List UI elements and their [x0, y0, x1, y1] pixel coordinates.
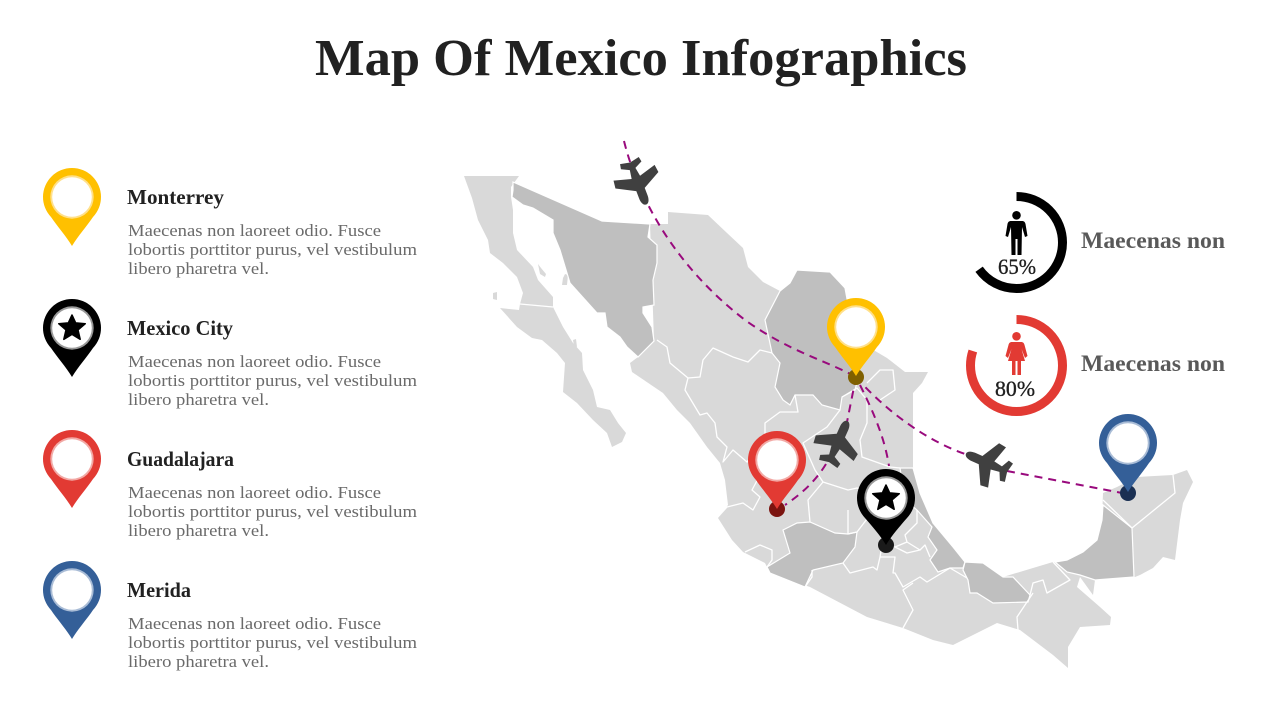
- map: mainland Mexico: [630, 212, 1193, 668]
- map: Baja California peninsula: [464, 176, 626, 447]
- map pin: Merida: [1099, 414, 1157, 501]
- map: Campeche: [1055, 505, 1134, 580]
- donut: 80%: [970, 320, 1062, 412]
- text block: Guadalajara: lobortis porttitor purus, vel vestibulum: [128, 502, 417, 521]
- map pin: Mexico City: [857, 469, 915, 553]
- legend item: Mexico City: [43, 299, 417, 409]
- text block: Guadalajara: Maecenas non laoreet odio. Fusce: [128, 483, 381, 502]
- map: state borders: [657, 340, 1175, 630]
- icon: airplane 3: [957, 433, 1018, 494]
- icon: red pin: [43, 430, 101, 508]
- map pin: Monterrey: [827, 298, 885, 385]
- text block: Mexico City: libero pharetra vel.: [128, 390, 269, 409]
- legend item: Merida: [43, 561, 417, 671]
- label: Maecenas non: Maecenas non: [1081, 228, 1225, 253]
- text block: Merida: Maecenas non laoreet odio. Fusce: [128, 614, 381, 633]
- map: Veracruz: [900, 468, 965, 572]
- text block: Guadalajara: libero pharetra vel.: [128, 521, 269, 540]
- icon: black star pin: [43, 299, 101, 377]
- map: Michoacan: [767, 522, 857, 587]
- heading: Monterrey: Monterrey: [127, 185, 224, 209]
- icon: blue pin: [43, 561, 101, 639]
- icon: man: [1006, 211, 1028, 255]
- text block: Mexico City: Maecenas non laoreet odio. Fusce: [128, 352, 381, 371]
- label: 65%: 65%: [998, 254, 1036, 279]
- map pin: Guadalajara: [748, 431, 806, 517]
- map: southern Veracruz: [963, 562, 1030, 603]
- donut: 65%: [970, 196, 1062, 288]
- legend item: Guadalajara: [43, 430, 417, 540]
- text block: Merida: libero pharetra vel.: [128, 652, 269, 671]
- text block: Monterrey: Maecenas non laoreet odio. Fusce: [128, 221, 381, 240]
- text block: Monterrey: lobortis porttitor purus, vel vestibulum: [128, 240, 417, 259]
- text block: Monterrey: [128, 221, 417, 278]
- heading: Merida: Merida: [127, 578, 191, 602]
- heading: Mexico City: Mexico City: [127, 316, 233, 340]
- icon: airplane 2: [807, 412, 868, 473]
- text block: Merida: lobortis porttitor purus, vel vestibulum: [128, 633, 417, 652]
- map of Mexico: [464, 176, 1193, 668]
- icon: yellow pin: [43, 168, 101, 246]
- label: 80%: 80%: [995, 376, 1035, 401]
- title: Map Of Mexico Infographics: [315, 30, 967, 87]
- stat: female 80%: [970, 320, 1225, 412]
- text block: Mexico City: [128, 352, 417, 409]
- stat: male 65%: [970, 196, 1225, 288]
- text block: Mexico City: lobortis porttitor purus, vel vestibulum: [128, 371, 417, 390]
- map: Coahuila: [765, 270, 858, 410]
- heading: Guadalajara: Guadalajara: [127, 447, 234, 471]
- text block: Monterrey: libero pharetra vel.: [128, 259, 269, 278]
- icon: woman: [1006, 332, 1028, 375]
- text block: Merida: [128, 614, 417, 671]
- legend item: Monterrey: [43, 168, 417, 278]
- flight routes: [624, 141, 1122, 505]
- text block: Guadalajara: [128, 483, 417, 540]
- label: Maecenas non: Maecenas non: [1081, 351, 1225, 376]
- icon: airplane 1: [608, 152, 668, 213]
- map: Sonora: [512, 182, 657, 357]
